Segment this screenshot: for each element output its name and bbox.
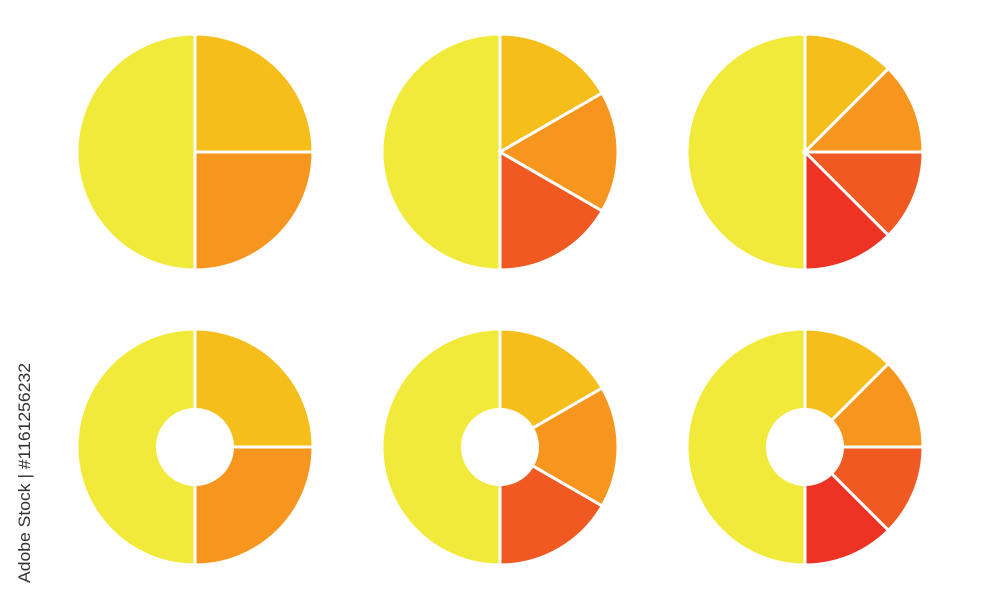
donut chart: 2 slices (77, 329, 313, 565)
donut chart: 4 slices (687, 329, 923, 565)
side stock id text: Adobe Stock | #1161256232 (15, 363, 34, 583)
pie chart: 2 slices (77, 34, 313, 270)
pie chart: 4 slices (687, 34, 923, 270)
pie chart: 3 slices (382, 34, 618, 270)
donut chart: 3 slices (382, 329, 618, 565)
